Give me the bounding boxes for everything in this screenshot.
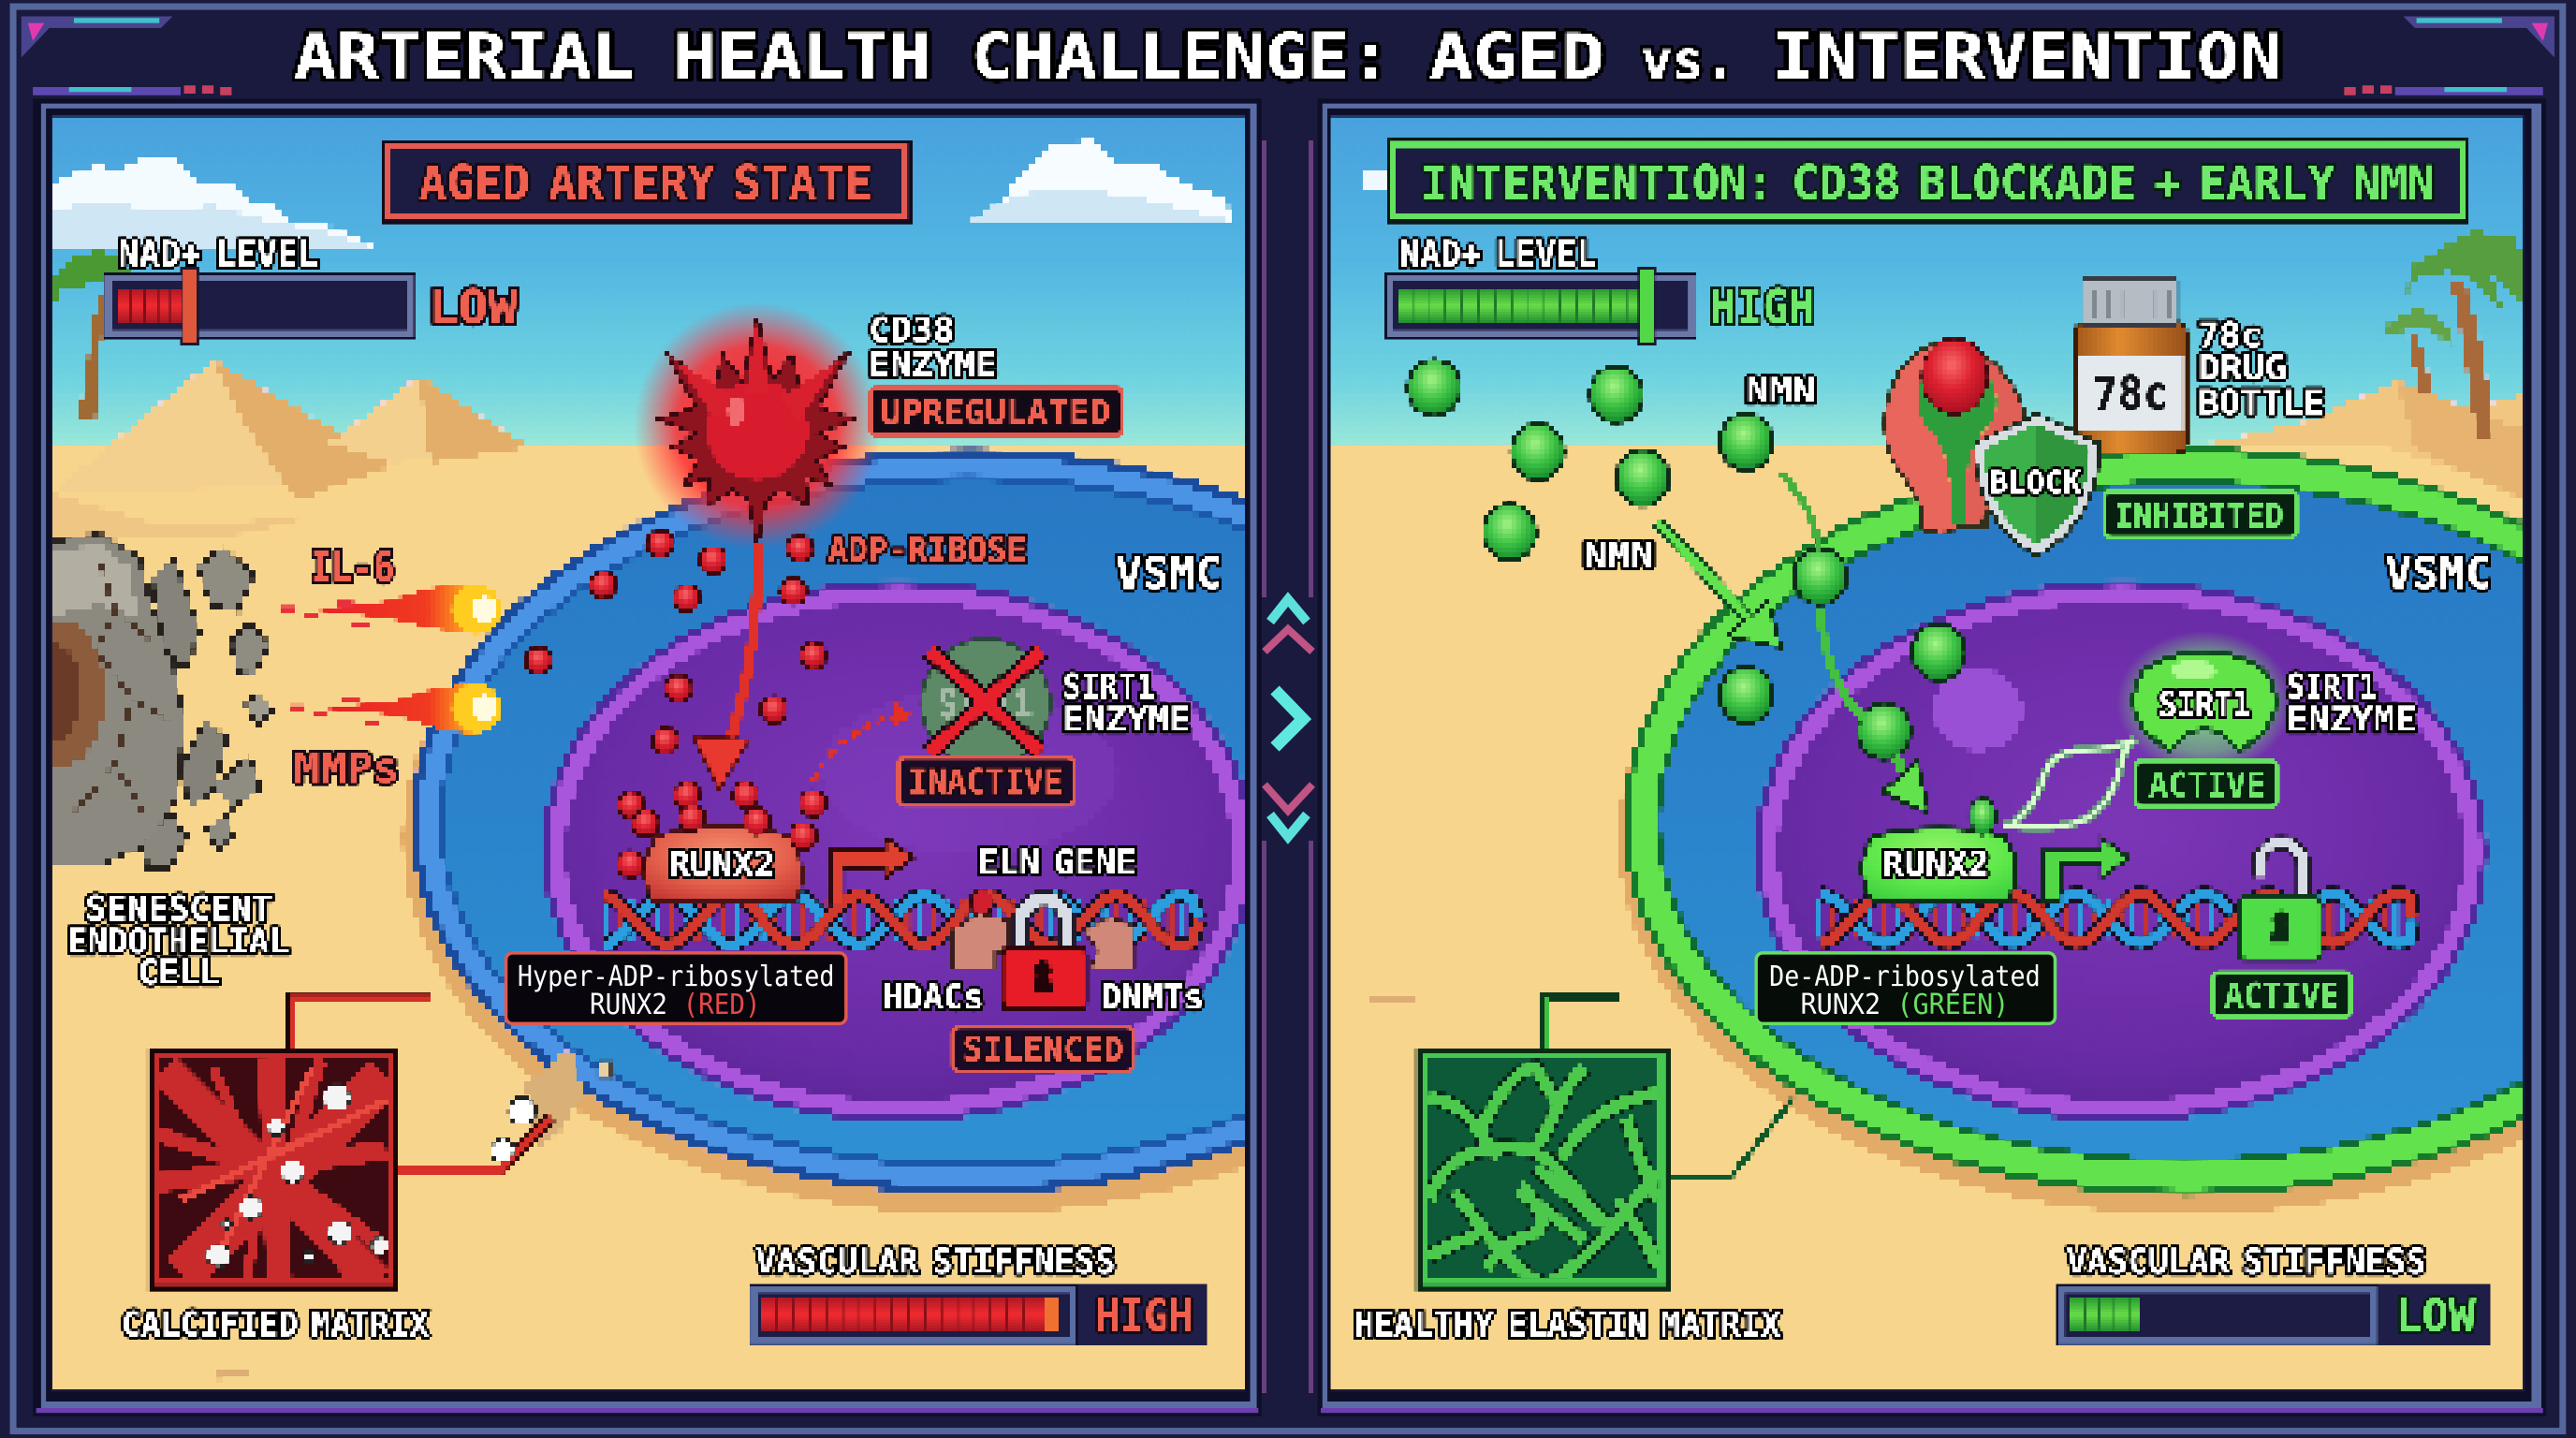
badge: gene active: ACTIVE — [2224, 976, 2339, 1016]
callout: de-ADP-ribosylated RUNX2: De-ADP-ribosylated — [1769, 961, 2041, 993]
labels: intervention: 78c — [2198, 315, 2262, 355]
objects: NMN, receptor, shield, bottle, gene and RUNX2 — [1408, 279, 2415, 960]
title: vs. — [1641, 30, 1734, 91]
labels: aged artery: ADP-RIBOSE — [828, 530, 1027, 570]
title: CHALLENGE: — [971, 20, 1391, 93]
glow: active SIRT1 — [2116, 631, 2292, 773]
labels: aged artery: VASCULAR STIFFNESS — [755, 1241, 1116, 1282]
labels: aged artery: ENDOTHELIAL — [67, 921, 289, 961]
vascular stiffness gauge: low — [2056, 1284, 2489, 1345]
panel heading: intervention — [1388, 139, 2467, 222]
labels: aged artery: CELL — [138, 952, 220, 992]
labels: intervention: BOTTLE — [2198, 382, 2324, 422]
labels: intervention: HEALTHY ELASTIN MATRIX — [1354, 1304, 1780, 1344]
title: HEALTH — [674, 20, 931, 93]
labels: intervention: VASCULAR STIFFNESS — [2067, 1241, 2426, 1282]
labels: intervention: NMN — [1747, 371, 1815, 411]
labels: intervention: HIGH — [1710, 281, 1815, 336]
NAD+ level gauge: high — [1384, 268, 1697, 344]
glow: CD38 upregulated — [634, 302, 881, 550]
title: AGED — [1429, 20, 1605, 93]
labels: aged artery: VSMC — [1116, 548, 1222, 599]
badge: inactive: INACTIVE — [909, 762, 1062, 802]
labels: aged artery: MMPs — [294, 744, 399, 792]
callout: de-ADP-ribosylated RUNX2: RUNX2 (GREEN) — [1800, 989, 2009, 1021]
labels: intervention: 78c — [2093, 366, 2169, 420]
scene: desert beach and aged cell body — [52, 114, 1245, 1389]
labels: intervention: SIRT1 — [2287, 667, 2377, 707]
aged panel interface: gauges, heading, badges and labels — [67, 141, 1222, 1345]
labels: aged artery: ENZYME — [1062, 699, 1191, 740]
labels: intervention: VSMC — [2385, 548, 2492, 599]
healthy elastin matrix inset and leader lines — [1416, 997, 1793, 1290]
labels: intervention: ENZYME — [2287, 699, 2417, 740]
callout: hyper-ADP-ribosylated RUNX2: Hyper-ADP-ribosylated — [518, 961, 835, 993]
labels: aged artery: NAD+ LEVEL — [118, 233, 318, 275]
labels: aged artery: HDACs — [882, 977, 984, 1018]
labels: aged artery: ENZYME — [869, 345, 997, 385]
panel heading: aged artery state: AGED ARTERY STATE — [419, 156, 872, 212]
labels: aged artery — [67, 233, 1222, 1344]
labels: intervention: NAD+ LEVEL — [1399, 233, 1597, 275]
labels: intervention — [1354, 233, 2492, 1344]
labels: intervention: SIRT1 — [2159, 684, 2250, 725]
labels: aged artery: SIRT1 — [1062, 667, 1155, 707]
labels: aged artery: HIGH — [1096, 1291, 1193, 1343]
labels: intervention: BLOCK — [1989, 463, 2082, 500]
NAD+ level gauge: low — [104, 268, 416, 344]
labels: aged artery: SENESCENT — [85, 888, 272, 929]
callout: de-ADP-ribosylated RUNX2 — [1756, 953, 2056, 1023]
panel heading: aged artery state — [383, 141, 910, 222]
labels: aged artery: RUNX2 — [668, 844, 775, 884]
left panel: aged artery state — [20, 107, 1536, 1400]
intervention panel interface: gauges, heading, badges and labels — [1354, 139, 2492, 1345]
callout: hyper-ADP-ribosylated RUNX2 — [506, 953, 846, 1023]
labels: intervention: NMN — [1584, 535, 1654, 575]
callout: hyper-ADP-ribosylated RUNX2: RUNX2 (RED) — [590, 989, 761, 1021]
centre divider with chevrons — [1262, 140, 1313, 1393]
title: INTERVENTION — [1773, 20, 2282, 93]
title: ARTERIAL — [294, 20, 634, 93]
labels: aged artery: ELN GENE — [977, 843, 1136, 883]
badge: silenced: SILENCED — [962, 1030, 1123, 1070]
scene: desert beach and healthy cell body — [1323, 107, 2576, 1400]
badge: upregulated: UPREGULATED — [881, 392, 1110, 433]
calcified matrix inset and leader lines — [148, 997, 611, 1290]
objects: enzyme, fireballs, molecules and gene — [279, 317, 1199, 1009]
badge: inhibited: INHIBITED — [2115, 495, 2283, 536]
objects: enzyme, fireballs, molecules and gene: SIRT1 — [938, 682, 1033, 727]
panel heading: intervention: INTERVENTION: CD38 BLOCKADE + EARLY NMN — [1421, 156, 2435, 212]
labels: aged artery: LOW — [429, 281, 518, 336]
labels: aged artery: IL-6 — [311, 542, 394, 592]
labels: aged artery: CD38 — [869, 310, 955, 350]
labels: intervention: DRUG — [2198, 347, 2287, 388]
title — [294, 20, 2282, 93]
vascular stiffness gauge: high — [749, 1284, 1206, 1345]
labels: intervention: LOW — [2395, 1291, 2476, 1343]
labels: aged artery: DNMTs — [1101, 977, 1204, 1018]
labels: intervention: RUNX2 — [1882, 844, 1989, 884]
badge: SIRT1 active: ACTIVE — [2149, 765, 2265, 805]
right panel: intervention — [1323, 107, 2576, 1400]
labels: aged artery: CALCIFIED MATRIX — [122, 1304, 429, 1344]
